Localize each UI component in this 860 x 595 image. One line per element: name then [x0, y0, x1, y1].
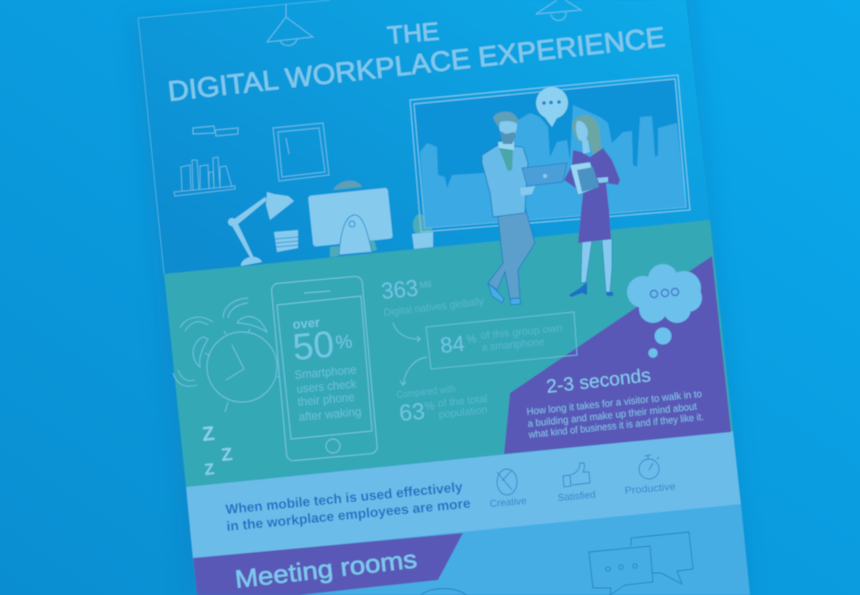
stat box: 84 percent: 84 — [439, 331, 466, 358]
icon: potted cactus — [412, 214, 433, 249]
icon: sleeping z letters: Z — [220, 444, 233, 465]
icon: wall shelves — [193, 126, 238, 136]
stat box: 84 percent — [426, 312, 577, 369]
neck — [498, 141, 514, 150]
icon: chat bubbles — [589, 532, 693, 595]
window with city skyline — [410, 75, 690, 232]
illustration: woman with tablet — [564, 115, 620, 297]
phone statistic text: % — [335, 332, 353, 354]
shoes — [488, 283, 521, 305]
stat: 63 percent — [396, 384, 488, 426]
infographic page — [138, 0, 750, 595]
purple panel text: How long it takes for a visitor to walk in to — [526, 389, 703, 418]
phone statistic text: 50 — [291, 323, 336, 368]
stat: 363 million — [380, 275, 485, 319]
legs — [581, 239, 612, 292]
panel: light mobile tech band — [186, 431, 741, 560]
panel: purple first impression — [504, 256, 731, 454]
panel: header scene background — [138, 0, 710, 274]
purple panel text: what kind of business it is and if they like it. — [527, 412, 704, 441]
panel: green statistics band — [164, 220, 733, 487]
mobile tech heading: in the workplace employees are more — [226, 496, 472, 534]
label: satisfied: Satisfied — [557, 490, 596, 504]
phone statistic text: Smartphone — [294, 362, 357, 382]
icon: sleeping z letters: Z — [201, 423, 216, 446]
stat: 63 percent: Compared with — [396, 384, 456, 401]
purple panel text: 2-3 seconds — [545, 365, 652, 398]
icon: stack of papers — [274, 230, 298, 252]
phone statistic text — [291, 315, 362, 424]
icon: partial circle at bottom edge — [421, 589, 466, 595]
documents — [570, 162, 598, 195]
label: productive: Productive — [624, 482, 677, 497]
icon: sleeping z letters — [201, 423, 233, 479]
dress — [564, 148, 620, 243]
shirt — [499, 148, 513, 171]
hair — [493, 112, 519, 128]
heading: meeting rooms: Meeting rooms — [234, 545, 419, 594]
ribbon: meeting rooms — [193, 533, 463, 595]
icon: desktop computer — [308, 181, 393, 257]
icon: productive stopwatch — [639, 455, 659, 479]
icon: bookshelf — [174, 157, 235, 196]
phone statistic text: users check — [296, 377, 358, 396]
stat: 363 million: Digital natives globally — [383, 296, 485, 319]
illustration: laptop — [522, 163, 567, 186]
icon: speech bubble — [536, 87, 568, 127]
head — [499, 112, 517, 138]
title: DIGITAL WORKPLACE EXPERIENCE — [166, 21, 667, 107]
stat: 363 million: Mil — [419, 279, 432, 290]
mobile tech heading: When mobile tech is used effectively — [225, 479, 464, 517]
stat: 363 million: 363 — [380, 275, 419, 304]
phone statistic text: after waking — [298, 404, 362, 424]
icon: wall picture — [273, 123, 329, 181]
label: creative: Creative — [489, 496, 528, 510]
title: THE — [386, 18, 440, 50]
hair — [572, 115, 603, 160]
page shadow — [130, 0, 750, 595]
stat box: 84 percent: a smartphone — [481, 336, 545, 354]
phone statistic text: their phone — [297, 390, 355, 409]
stat: 63 percent: 63 — [398, 398, 426, 426]
icon: satisfied thumbs up — [563, 463, 590, 487]
icon: thought cloud — [627, 264, 702, 358]
purple panel text: a building and make up their mind about — [527, 402, 698, 430]
phone body — [271, 276, 378, 461]
illustration: man with laptop — [482, 112, 535, 305]
trousers — [488, 207, 535, 299]
stat: 63 percent: % — [424, 400, 435, 413]
icon: ceiling lamp left — [267, 4, 313, 46]
stat box: 84 percent: % — [466, 333, 477, 346]
mobile tech heading — [225, 479, 472, 534]
phone — [271, 276, 378, 461]
stat: 63 percent: of the total — [437, 393, 488, 410]
skyline — [420, 105, 686, 228]
icon: ceiling lamp right — [536, 0, 581, 21]
hand — [520, 186, 535, 196]
icon: alarm clock — [173, 298, 280, 412]
heels — [569, 282, 613, 297]
icon: sleeping z letters: Z — [204, 461, 215, 479]
stat box: 84 percent: of this group own — [480, 322, 563, 342]
panel: lower meeting rooms section — [193, 504, 750, 595]
hand — [597, 177, 608, 183]
jacket — [482, 145, 528, 217]
face — [576, 121, 588, 142]
icon: desk lamp — [228, 192, 294, 266]
phone statistic text: over — [292, 315, 321, 332]
beard — [500, 131, 516, 144]
neck — [582, 140, 590, 154]
purple panel text — [526, 365, 704, 441]
icon: creative — [497, 469, 517, 495]
page edge line — [138, 0, 330, 274]
arrow from box — [400, 357, 427, 385]
arrow to box — [393, 323, 420, 342]
stat: 63 percent: population — [438, 404, 488, 421]
